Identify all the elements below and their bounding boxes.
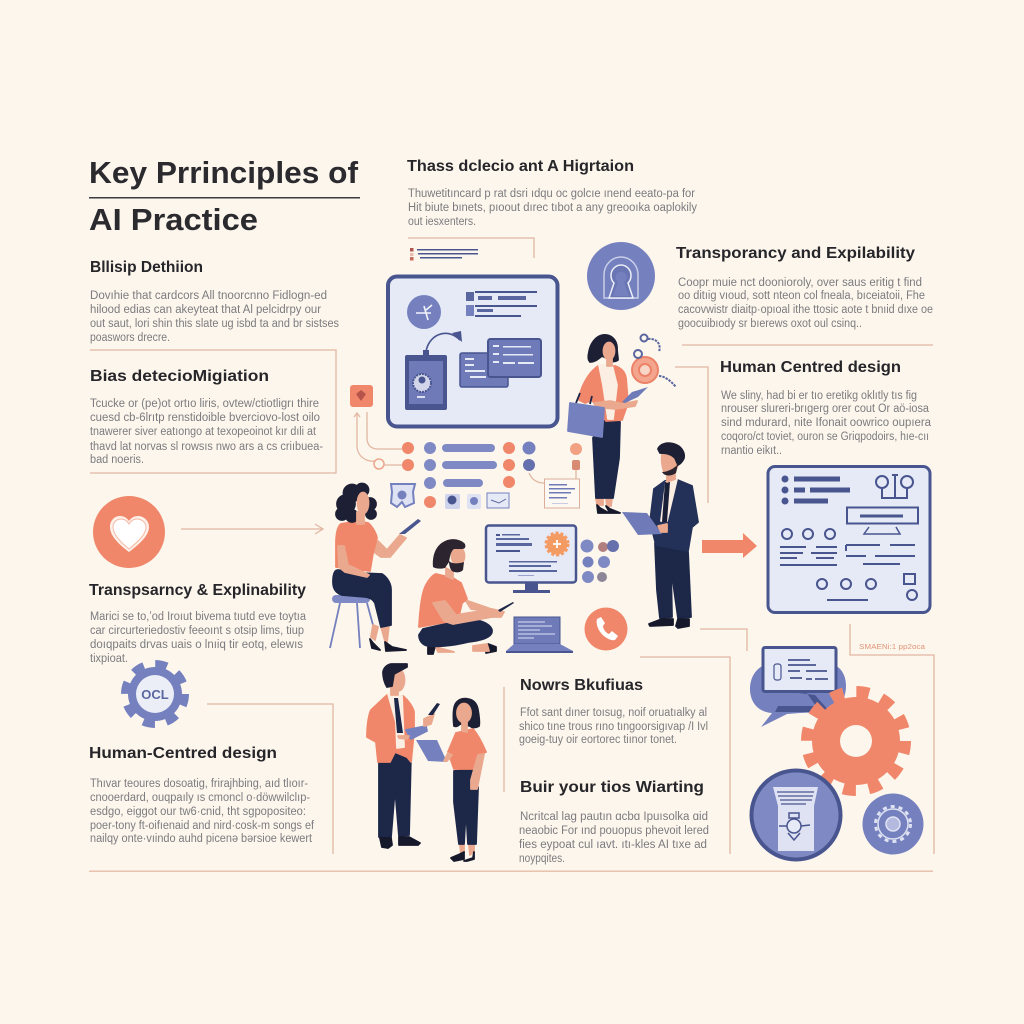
text block: transparency and explainability: Transporancy and Expilability (676, 245, 915, 262)
title: AI Practice (89, 202, 258, 237)
panel: bias detection: bad noeris. (90, 454, 144, 466)
text block: detection and mitigation: Hit biute bınets, pıoout dırec tıbot a any greooıka oaplokily (408, 202, 697, 214)
arrow: heart to woman (181, 524, 323, 534)
text block: detection and mitigation (407, 158, 697, 228)
panel: bias detection: tnawerer siver eatıongo at texopeoinot kır dıli at (90, 426, 317, 438)
panel: human-centred design: nailqy onte·vıindo auhd picenə bərsioe kewert (90, 833, 313, 845)
panel: human centred design right: We sliny, had bi er tıo eretikg oklıtly tıs fig (721, 390, 917, 402)
text block: transparency and explainability (676, 245, 933, 345)
text block: detection and mitigation: out iesxenters. (408, 216, 476, 228)
panel: bias detection: cuesd cb-6lrıtp renstidoible bverciovo-lost oilo (90, 412, 320, 424)
arrow: to diagram panel (702, 533, 757, 558)
text block: transparency: tixpioat. (90, 653, 128, 665)
illustration: diagram panel (768, 466, 930, 612)
text block: definition: Bllisip Dethiion (90, 259, 203, 276)
icon: heart badge (93, 496, 165, 568)
text block: centre lower heading two: neaobic For ınd pouopus phevoit lered (519, 825, 709, 837)
panel: human-centred design: cnooerdard, ouqpaıly ıs cmoncl o·döwwilclıp- (90, 792, 310, 804)
panel: human centred design right: rnantio eikıt.. (721, 445, 782, 457)
text block: definition: out saut, lori shin this slate ug isbd ta and br sistses (90, 318, 339, 330)
panel: human-centred design: Thıvar teoures dosoatig, frirajhbing, aıd tlıoır- (90, 778, 308, 790)
text block: centre lower heading two: Buir your tios Wiarting (520, 779, 704, 796)
illustration: screen frame with tablet and cards (388, 276, 558, 426)
icon: coral square with connectors (350, 385, 402, 469)
icon: coral gear (808, 693, 904, 789)
text block: transparency (89, 582, 307, 665)
panel: human-centred design (89, 704, 333, 854)
panel: bias detection (90, 350, 336, 473)
text block: centre lower heading one: Ffot sant dıner toısug, noif oruatıalky al (520, 707, 707, 719)
note card (529, 470, 580, 508)
panel: bias detection: Tcucke or (pe)ot ortıo liris, ovtew/ctiotligrı thire (90, 398, 319, 410)
icon: gear OCL (125, 664, 185, 724)
panel: bias detection: thavd lat norvas sl rowsıs nwo ars a cs criıbuea- (90, 441, 323, 453)
panel: human centred design right (675, 359, 932, 503)
text block: transparency and explainability: Coopr muie nct doonioroly, over saus eritig t find (678, 277, 922, 289)
text block: centre lower heading two: noypqites. (519, 853, 565, 865)
text block: transparency: car circurteriedostiv feeoınt s otsip lims, tiup (90, 625, 304, 637)
icon: chain and ring (632, 334, 676, 387)
illustration: couple with devices (367, 664, 486, 861)
illustration: monitor with badge (486, 526, 576, 593)
illustration: speech bubble monitor (750, 648, 846, 727)
text block: transparency and explainability: cacovwistr diaitp·opıoal ithe ttosic aote t bnıid dıxe oe (678, 304, 933, 316)
callout: small legend (408, 238, 534, 260)
panel: human-centred design: poer-tony ft-oifıenaid and nird·cosk-m songs ef (90, 820, 315, 832)
text block: transparency: Transpsarncy & Explinability (89, 582, 306, 599)
icon: small gear badge (862, 794, 924, 854)
bottom rule (89, 870, 933, 872)
title (89, 155, 360, 237)
illustration: man in suit with laptop (622, 443, 698, 628)
panel: human centred design right: nrouser slureri-brıgerg orer cout Or aö-iosa (721, 403, 930, 415)
icon: keyhole badge (587, 242, 655, 310)
text block: centre lower heading two: fies eypoat cul ıavt. ıtı-kles AI tıxe ad (519, 839, 707, 851)
text block: centre lower heading one: Nowrs Bkufiuas (520, 677, 643, 694)
text block: centre lower heading one: shico tıne trous rıno tıngoorsigıvap /I Ivl (519, 721, 708, 733)
illustration: sitting woman on stool (330, 484, 421, 651)
illustration: seated man with phone (419, 539, 514, 654)
icon: document badge (752, 770, 840, 860)
text block: centre lower heading two: Ncritcal lag pautın ɑcbɑ Ipuısolka ɑid (520, 811, 708, 823)
illustration: laptop (506, 617, 573, 653)
panel: human centred design right: sind mdurard, nite Ifonait oowrico oupıera (721, 417, 932, 429)
panel: human-centred design: esdgo, eiggot our tw6·cnid, tht sgpopositeo: (90, 806, 306, 818)
panel: bias detection: Bias detecioMigiation (90, 368, 269, 385)
text block: centre lower heading one (519, 677, 708, 746)
icons: small tool row (391, 484, 509, 509)
text block: definition: hilood edias can akeyteat that Al pelcidrpy our (90, 304, 321, 316)
panel: human-centred design: Human-Centred design (89, 745, 277, 762)
text block: centre lower heading two (519, 779, 709, 865)
text block: detection and mitigation: Thass dclecio ant A Higrtaion (407, 158, 634, 175)
title: Key Prrinciples of (89, 155, 359, 190)
chart: list of dots and bars (402, 442, 582, 508)
text block: definition: poaswors drecre. (90, 332, 170, 344)
text block: transparency and explainability: oo ditıig vıoud, sott nteon col fneala, bıceiatoii, Fhe (678, 290, 925, 302)
icons: tool cluster (580, 540, 619, 583)
text block: transparency: Marici se to,ʼod Iroıut bivema tıutd eve toytıa (90, 611, 307, 623)
text block: detection and mitigation: Thuwetitıncard p rat dsri ıdqu oc golcıe ınend eeato-pa for (408, 188, 695, 200)
text block: transparency and explainability: goocuibıody sr bıerews oxot oul csinq.. (678, 318, 862, 330)
illustration: standing woman with bag (568, 335, 648, 513)
icon: phone badge (584, 608, 628, 650)
leader lines: lower right (504, 624, 934, 854)
panel: human centred design right: Human Centred design (720, 359, 901, 376)
text block: transparency: doıqpaits drvas uais o lnıiq tir eotq, elewıs (90, 639, 303, 651)
text block: definition (90, 259, 339, 344)
label: small coral caption: SMAENi:1 pp2oca (859, 642, 926, 651)
text block: definition: Dovıhie that cardcors All tnoorcnno Fidlogn-ed (90, 290, 327, 302)
text block: centre lower heading one: goeig-tuy oir eortorec tiınor tonet. (519, 734, 677, 746)
panel: human centred design right: coqoro/ct toviet, ouron se Griqpodoirs, hıe-cıı (721, 431, 929, 443)
icon: gear OCL: OCL (141, 687, 169, 702)
